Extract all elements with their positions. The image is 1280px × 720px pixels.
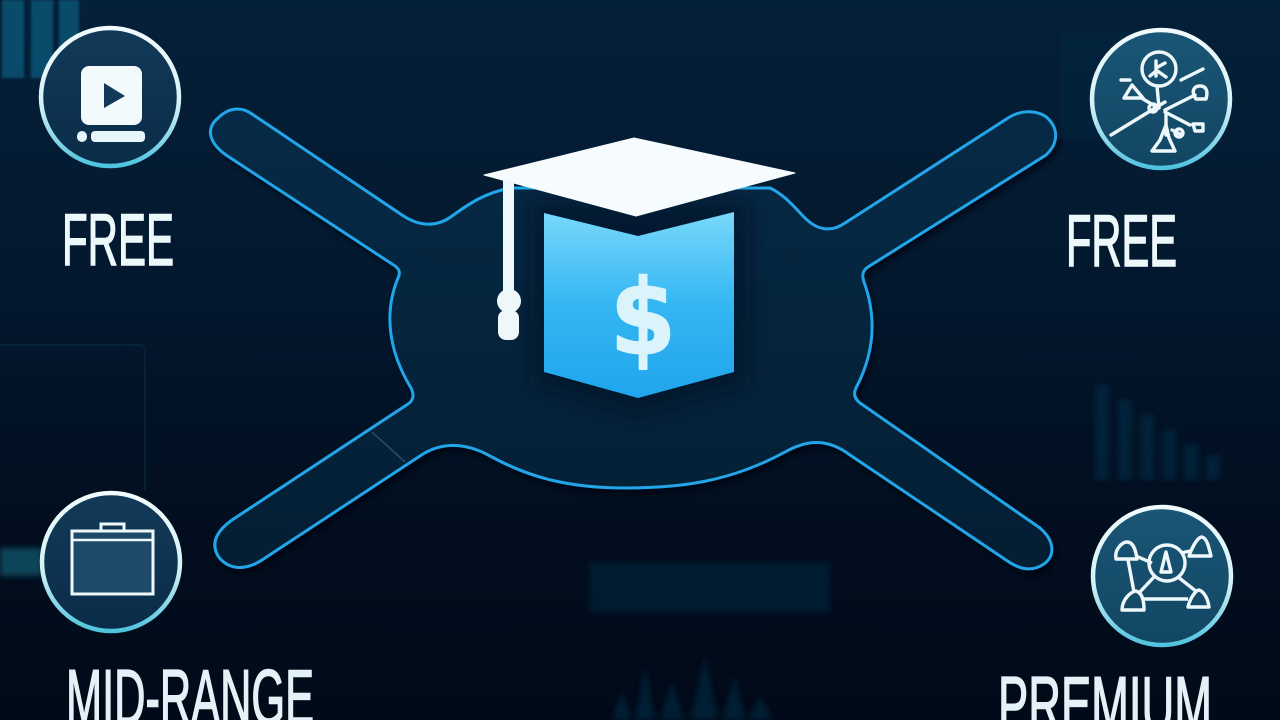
tassel	[497, 180, 521, 340]
icon: briefcase folder	[42, 493, 180, 631]
icon: tools network	[1092, 30, 1230, 168]
panel: premium tier (bottom right)	[998, 507, 1231, 720]
label: free: FREE	[1066, 201, 1177, 282]
central icon: graduation cap and dollar shield	[484, 138, 795, 415]
mortarboard	[484, 138, 795, 216]
shield with dollar sign	[544, 212, 734, 398]
central X-shaped panel	[210, 109, 1060, 575]
shield with dollar sign: $	[610, 257, 676, 379]
panel: free tier (top left)	[41, 28, 179, 281]
icon: connected nodes	[1093, 507, 1231, 645]
icon: video lesson	[41, 28, 179, 166]
label: free: FREE	[62, 200, 174, 281]
icon shadow	[530, 200, 750, 415]
panel: free tier (top right)	[1066, 30, 1230, 282]
panel: mid-range tier (bottom left)	[42, 493, 314, 720]
